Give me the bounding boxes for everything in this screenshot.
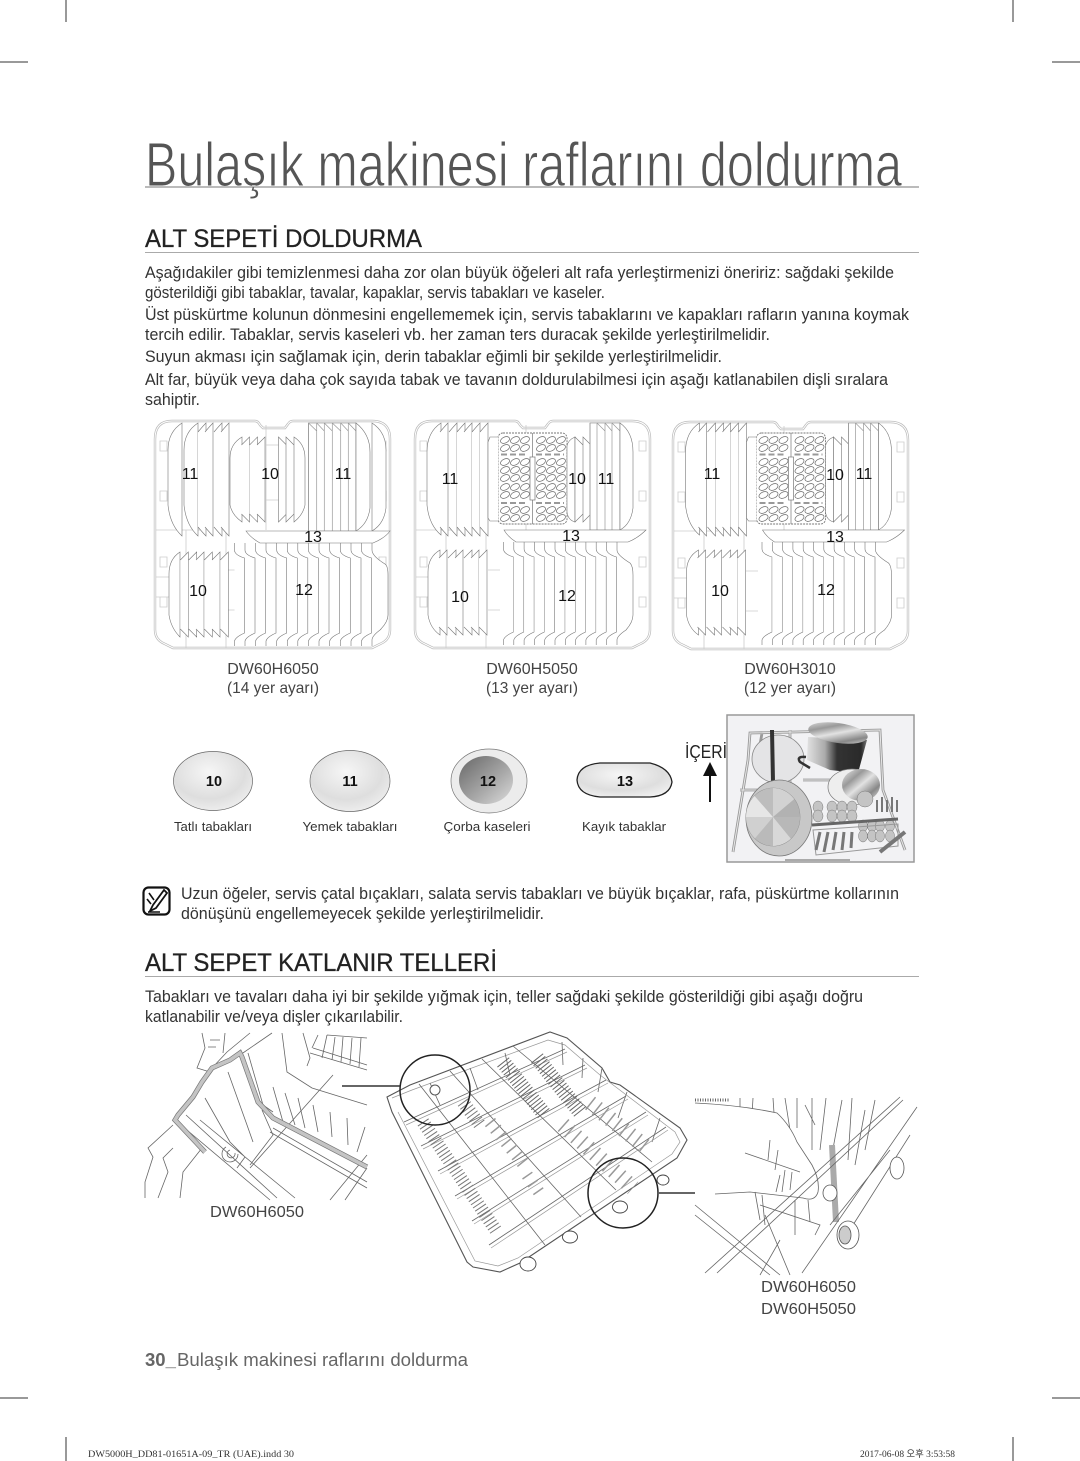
illustration: hand folding tines <box>695 1097 917 1275</box>
rack captions: DW60H5050 <box>486 661 578 678</box>
dish legend: 11 <box>342 774 358 790</box>
dish legend: Kayık tabaklar <box>582 819 667 834</box>
arrow: içeri: İÇERİ <box>685 742 727 762</box>
rack diagram: DW60H3010: 13 <box>826 529 844 546</box>
rack captions: (13 yer ayarı) <box>486 680 578 697</box>
body text: loading instructions: Aşağıdakiler gibi temizlenmesi daha zor olan büyük öğeleri alt rafa yerleştirmenizi öneririz: sağdaki şekilde <box>145 264 894 282</box>
rack diagram: DW60H5050: 12 <box>558 588 576 605</box>
rack diagram: DW60H3010: 12 <box>817 582 835 599</box>
rack diagram: DW60H6050: 13 <box>304 529 322 546</box>
rack diagram: DW60H3010: 10 <box>711 583 729 600</box>
rack diagram: DW60H5050 <box>415 421 650 648</box>
dish legend: 13 <box>617 774 633 790</box>
model labels: DW60H6050 <box>761 1279 856 1296</box>
rack diagram: DW60H6050: 11 <box>335 466 351 483</box>
note text: Uzun öğeler, servis çatal bıçakları, salata servis tabakları ve büyük bıçaklar, rafa, püskürtme kollarının <box>181 885 899 903</box>
rack captions: (12 yer ayarı) <box>744 680 836 697</box>
icon: note pencil <box>144 888 170 914</box>
illustration: folding rack closeup: DW60H6050 <box>210 1204 304 1221</box>
rack diagram: DW60H3010 <box>673 422 908 649</box>
photo: loaded lower rack <box>727 715 914 862</box>
rack captions: DW60H3010 <box>744 661 836 678</box>
rack diagram: DW60H6050: 10 <box>261 466 279 483</box>
dish legend <box>174 749 672 834</box>
body text: folding tines <box>145 988 863 1026</box>
dish legend: Yemek tabakları <box>302 819 398 834</box>
rack captions: (14 yer ayarı) <box>227 680 319 697</box>
rack diagram: DW60H3010: 10 <box>826 467 844 484</box>
heading: alt sepeti doldurma: ALT SEPETİ DOLDURMA <box>145 224 422 253</box>
model labels <box>761 1279 856 1318</box>
rack diagram: DW60H5050: 10 <box>451 589 469 606</box>
dish legend: 12 <box>480 774 496 790</box>
rack captions <box>227 661 836 697</box>
illustration: lower basket with callouts <box>342 1032 715 1272</box>
rack diagram: DW60H5050: 13 <box>562 528 580 545</box>
rack diagram: DW60H3010: 11 <box>856 466 872 483</box>
print slug <box>88 1449 955 1460</box>
note text: dönüşünü engellemeyecek şekilde yerleştirilmelidir. <box>181 905 544 923</box>
print slug: 2017-06-08 오후 3:53:58 <box>860 1449 955 1460</box>
arrow: içeri <box>685 742 727 802</box>
body text: folding tines: Tabakları ve tavaları daha iyi bir şekilde yığmak için, teller sağdaki şekilde gösterildiği gibi aşağı doğru <box>145 988 863 1006</box>
page footer: 30_ <box>145 1349 177 1370</box>
rack captions: DW60H6050 <box>227 661 319 678</box>
rack diagram: DW60H5050: 11 <box>598 471 614 488</box>
rack diagram: DW60H6050: 12 <box>295 582 313 599</box>
print slug: DW5000H_DD81-01651A-09_TR (UAE).indd 30 <box>88 1449 294 1460</box>
body text: loading instructions: Alt far, büyük veya daha çok sayıda tabak ve tavanın doldurulabilmesi için aşağı katlanabilen dişli sıralara <box>145 371 889 389</box>
body text: loading instructions: gösterildiği gibi tabaklar, tavalar, kapaklar, servis tabakları ve kaseler. <box>145 284 605 302</box>
dish legend: Çorba kaseleri <box>444 819 531 834</box>
model labels: DW60H5050 <box>761 1301 856 1318</box>
heading: alt sepet katlanir telleri: ALT SEPET KATLANIR TELLERİ <box>145 948 497 977</box>
page footer: Bulaşık makinesi raflarını doldurma <box>177 1349 469 1370</box>
body text: folding tines: katlanabilir ve/veya dişler çıkarılabilir. <box>145 1008 403 1026</box>
dish legend: Tatlı tabakları <box>174 819 252 834</box>
body text: loading instructions: sahiptir. <box>145 391 200 409</box>
rack diagram: DW60H5050: 11 <box>442 471 458 488</box>
rack diagram: DW60H6050: 11 <box>182 466 198 483</box>
rack diagram: DW60H5050: 10 <box>568 471 586 488</box>
dish legend: 10 <box>206 774 222 790</box>
rack diagram: DW60H6050: 10 <box>189 583 207 600</box>
body text: loading instructions <box>145 264 910 409</box>
illustration: folding rack closeup <box>145 1033 367 1221</box>
rack diagram: DW60H3010: 11 <box>704 466 720 483</box>
rack diagram: DW60H6050 <box>155 421 390 648</box>
body text: loading instructions: tercih edilir. Tabaklar, servis kaseleri vb. her zaman ters duracak şekilde yerleştirilmelidir. <box>145 326 770 344</box>
note text <box>181 885 899 923</box>
body text: loading instructions: Suyun akması için sağlamak için, derin tabaklar eğimli bir şekilde yerleştirilmelidir. <box>145 348 722 366</box>
body text: loading instructions: Üst püskürtme kolunun dönmesini engellememek için, servis tabaklarını ve kapakları rafların yanına koymak <box>145 306 910 324</box>
